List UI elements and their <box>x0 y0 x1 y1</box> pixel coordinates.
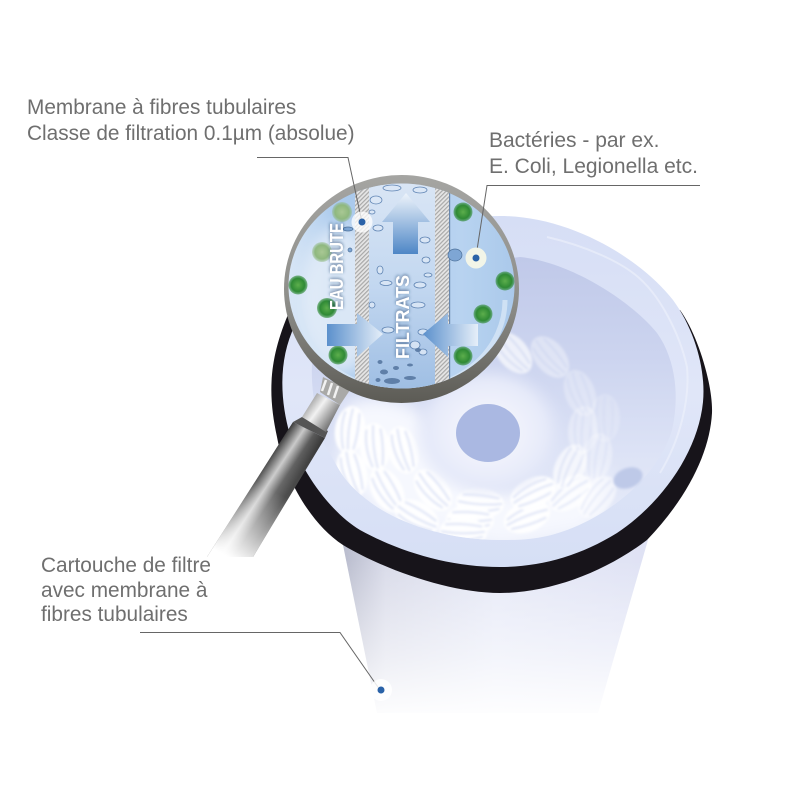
callout: cartridge: fibres tubulaires <box>41 603 188 626</box>
callout: cartridge: avec membrane à <box>41 579 208 602</box>
pleated membrane fibres <box>334 332 616 540</box>
filter cartridge bowl <box>282 216 703 567</box>
filtered water with bubbles <box>369 180 435 395</box>
label: filtrats: FILTRATS <box>393 275 413 359</box>
arrow left in <box>327 313 383 357</box>
central core <box>410 364 566 500</box>
arrow right in <box>423 313 478 357</box>
lens arc highlight <box>299 300 505 391</box>
magnifier handle <box>207 377 350 557</box>
callout: bacteria: E. Coli, Legionella etc. <box>489 155 698 178</box>
lens background <box>285 180 520 395</box>
label: eau brute: EAU BRUTE <box>327 223 347 310</box>
shadow spot <box>610 463 646 493</box>
bacteria <box>288 202 514 366</box>
cartridge body <box>335 540 660 722</box>
callout: membrane: Classe de filtration 0.1µm (absolue) <box>27 122 355 145</box>
inner lip <box>547 237 688 473</box>
central hole <box>456 404 520 462</box>
arrow up <box>382 193 430 254</box>
callout: membrane <box>27 96 372 232</box>
callout: bacteria <box>466 129 700 268</box>
inner chamber <box>312 257 676 540</box>
callout: cartridge: Cartouche de filtre <box>41 554 211 577</box>
callout: cartridge <box>41 554 392 701</box>
membrane walls <box>355 180 450 395</box>
magnifying glass <box>284 175 520 403</box>
bubble cluster <box>343 227 462 261</box>
black sealing ring <box>271 300 712 593</box>
callout: membrane: Membrane à fibres tubulaires <box>27 96 296 119</box>
callout: bacteria: Bactéries - par ex. <box>489 129 659 152</box>
